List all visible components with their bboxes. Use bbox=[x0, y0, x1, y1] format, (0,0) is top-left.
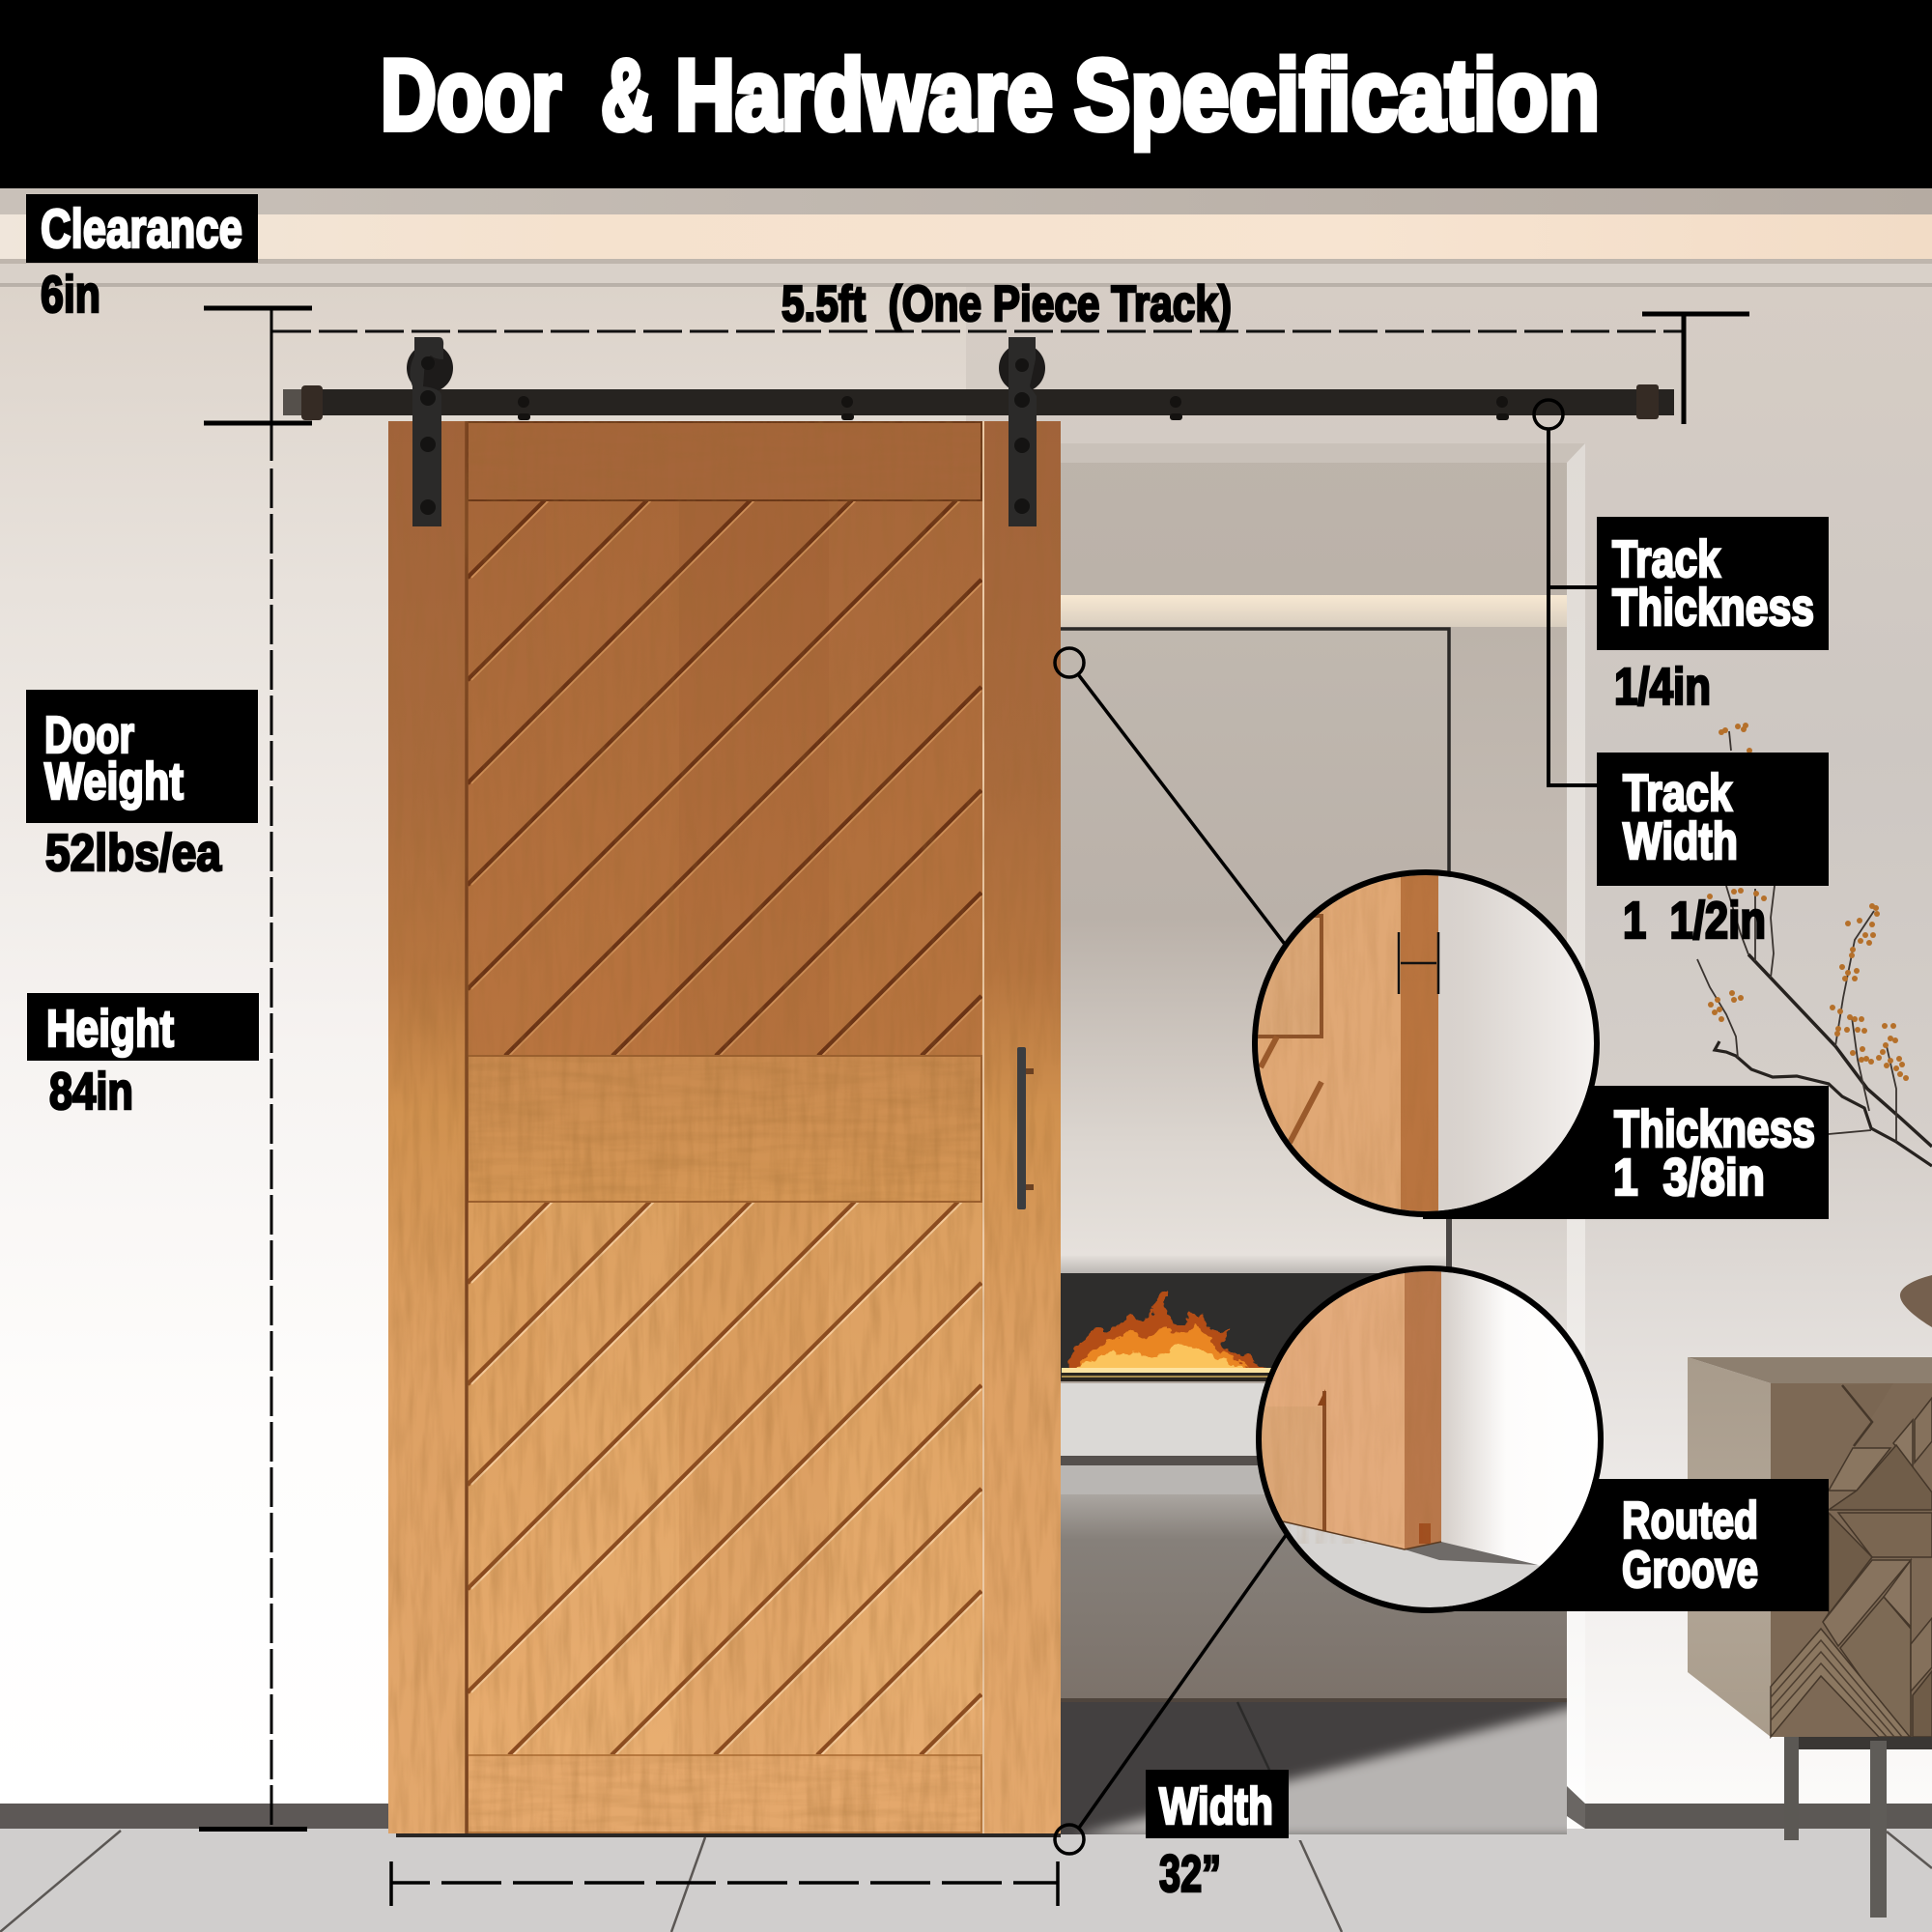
door rails bbox=[468, 422, 981, 1833]
right hanger bbox=[999, 337, 1045, 526]
clearance label bbox=[26, 194, 258, 324]
doorway opening and room beyond bbox=[1061, 443, 1585, 1840]
door stile seams bbox=[465, 421, 469, 1833]
left hanger bbox=[407, 337, 453, 526]
track thickness label: Track bbox=[1612, 530, 1721, 588]
track bolts bbox=[518, 396, 1509, 420]
door handle bbox=[1017, 1047, 1034, 1209]
vase bbox=[1900, 1275, 1932, 1327]
track thickness label bbox=[1597, 517, 1829, 716]
magnifier: routed groove bbox=[1256, 1268, 1604, 1610]
barn door track bbox=[283, 384, 1674, 420]
width label bbox=[1146, 1770, 1289, 1903]
thickness label: 1 3/8in bbox=[1613, 1149, 1765, 1207]
door weight label: Door bbox=[44, 706, 134, 764]
title: Door bbox=[381, 40, 561, 152]
door weight label: Weight bbox=[44, 753, 184, 810]
lower diagonal panel bbox=[468, 1202, 981, 1755]
title: Specification bbox=[1074, 40, 1600, 152]
track width label: 1 1/2in bbox=[1623, 892, 1766, 950]
cabinet bbox=[1688, 1357, 1932, 1918]
door weight label: 52lbs/ea bbox=[45, 824, 222, 882]
routed groove label: Routed bbox=[1622, 1492, 1758, 1549]
height label: Height bbox=[46, 1000, 174, 1058]
thickness label: Thickness bbox=[1614, 1100, 1815, 1158]
clearance dimension bbox=[204, 308, 312, 461]
width label: 32” bbox=[1159, 1845, 1221, 1903]
title banner bbox=[0, 0, 1932, 188]
track thickness label: Thickness bbox=[1612, 579, 1814, 637]
routed groove label bbox=[1430, 1479, 1829, 1611]
width label: Width bbox=[1159, 1777, 1273, 1835]
door weight label bbox=[26, 690, 258, 882]
track callout lines bbox=[1534, 400, 1597, 785]
magnifier: door thickness bbox=[1254, 871, 1602, 1219]
title: & bbox=[601, 40, 652, 152]
clearance label: Clearance bbox=[41, 198, 242, 260]
track width label: Width bbox=[1623, 812, 1738, 870]
fireplace flames bbox=[1062, 1292, 1276, 1381]
upper diagonal panel bbox=[468, 500, 981, 1056]
thickness callout pointer bbox=[1055, 648, 1287, 947]
height label: 84in bbox=[49, 1063, 133, 1121]
track length label: 5.5ft (One Piece Track) bbox=[781, 276, 1232, 332]
routed groove callout pointer bbox=[1055, 1534, 1287, 1854]
thickness label bbox=[1423, 1086, 1829, 1219]
width dimension bbox=[391, 1861, 1058, 1906]
track length dimension bbox=[272, 276, 1749, 424]
title bbox=[381, 40, 1600, 152]
track width label: Track bbox=[1623, 764, 1733, 822]
thickness measure marks bbox=[1399, 932, 1438, 994]
track width label bbox=[1597, 753, 1829, 950]
cabinet legs bbox=[1784, 1737, 1932, 1918]
track end stoppers bbox=[301, 384, 1659, 420]
clearance label: 6in bbox=[41, 266, 100, 324]
routed groove label: Groove bbox=[1622, 1541, 1758, 1599]
barn door bbox=[388, 421, 1061, 1837]
title: Hardware bbox=[675, 40, 1053, 152]
cabinet front relief bbox=[1771, 1383, 1932, 1737]
height dimension bbox=[199, 469, 307, 1832]
height label bbox=[27, 993, 259, 1121]
branches with berries bbox=[1697, 723, 1932, 1166]
track thickness label: 1/4in bbox=[1614, 658, 1711, 716]
